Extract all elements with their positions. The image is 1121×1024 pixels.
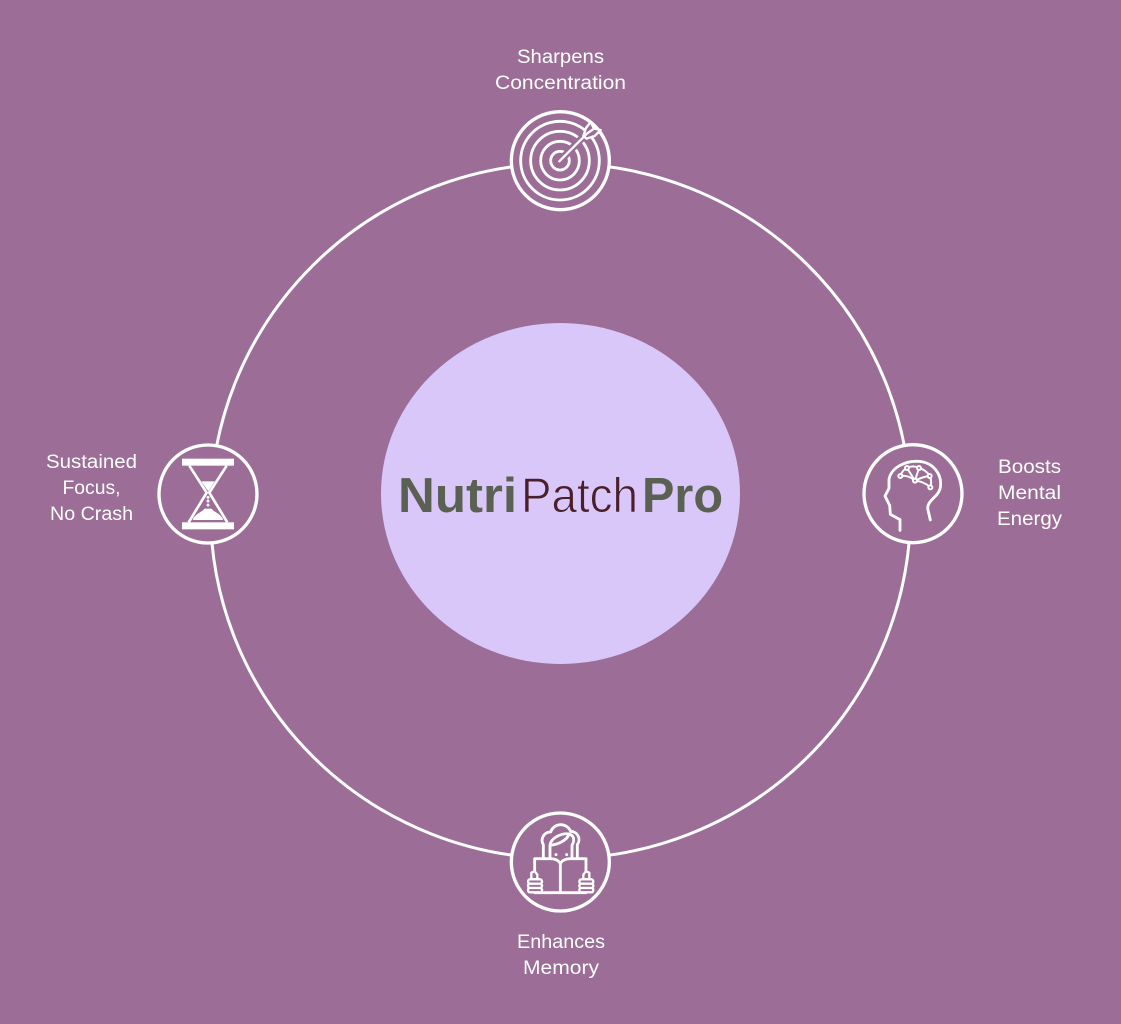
icon: head with brain network: [864, 445, 962, 543]
label: Sustained Focus, No Crash: Focus,: [62, 478, 120, 499]
node: Enhances Memory: [511, 813, 609, 979]
logo: NutriPatchPro: Patch: [521, 469, 638, 523]
label: Sharpens Concentration: Sharpens: [517, 47, 604, 68]
label: Sustained Focus, No Crash: No Crash: [50, 504, 133, 525]
logo: NutriPatchPro: Nutri: [398, 469, 517, 523]
node: Boosts Mental Energy: [864, 445, 1063, 543]
label: Sustained Focus, No Crash: Sustained: [46, 452, 137, 473]
orbit ring: [210, 164, 910, 858]
icon: target with arrow: [511, 112, 609, 210]
label: Boosts Mental Energy: Mental: [998, 483, 1061, 504]
label: Boosts Mental Energy: Energy: [997, 509, 1063, 530]
label: Boosts Mental Energy: Boosts: [998, 457, 1061, 478]
node: Sharpens Concentration: [495, 47, 626, 210]
node: Sustained Focus, No Crash: [46, 445, 257, 543]
icon: hourglass: [159, 445, 257, 543]
icon: person reading a book: [511, 813, 609, 911]
logo: NutriPatchPro: Pro: [642, 469, 723, 523]
center ellipse with logo: [381, 323, 740, 664]
label: Sharpens Concentration: Concentration: [495, 73, 626, 94]
logo: NutriPatchPro: [398, 469, 723, 523]
label: Enhances Memory: Memory: [523, 958, 600, 979]
label: Enhances Memory: Enhances: [517, 932, 605, 953]
